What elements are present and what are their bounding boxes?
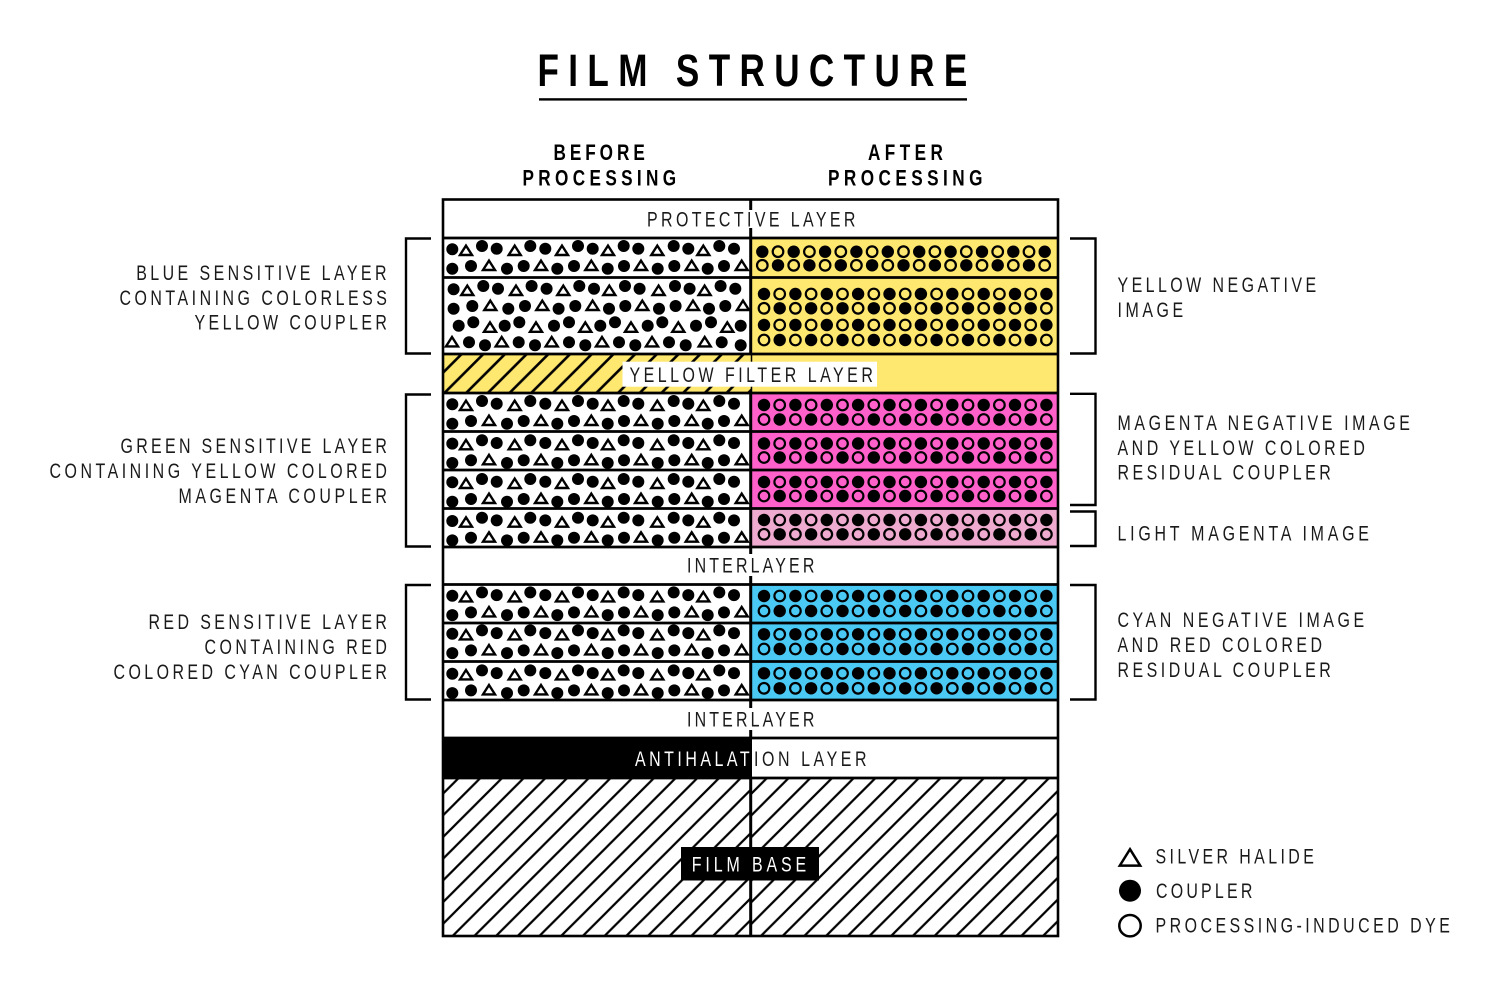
text: cyan negative image — [1118, 608, 1364, 682]
yellow filter hatch — [443, 354, 751, 393]
text: magenta negative image: MAGENTA NEGATIVE IMAGE — [1118, 411, 1410, 435]
text: red sensitive layer: RED SENSITIVE LAYER — [148, 610, 387, 634]
text: blue sensitive layer: BLUE SENSITIVE LAYER — [136, 261, 387, 285]
label: interlayer upper: INTERLAYER — [687, 554, 814, 577]
label: protective layer: PROTECTIVE LAYER — [647, 207, 855, 231]
bracket: red sensitive — [406, 585, 431, 700]
magenta negative dyes — [758, 399, 1053, 502]
column heading: before processing — [522, 141, 676, 191]
column heading: after processing: AFTER — [868, 141, 943, 166]
label: antihalation layer: ION LAYER — [754, 747, 867, 771]
text: green sensitive layer: GREEN SENSITIVE LAYER — [120, 434, 387, 458]
label: antihalation layer: ANTIHALAT — [635, 747, 750, 771]
cyan negative dyes — [758, 590, 1053, 694]
legend text: processing-induced dye: PROCESSING-INDUCED DYE — [1156, 914, 1450, 937]
protective layer — [443, 200, 1058, 238]
bracket: blue sensitive — [406, 238, 431, 354]
light magenta dyes — [758, 514, 1053, 540]
red sensitive layer grains — [446, 586, 748, 699]
bracket: yellow negative — [1070, 238, 1096, 354]
text: blue sensitive layer: CONTAINING COLORLESS — [120, 286, 387, 310]
text: blue sensitive layer — [120, 261, 387, 334]
text: yellow negative image — [1118, 273, 1316, 322]
text: red sensitive layer — [114, 610, 387, 684]
column heading: before processing: PROCESSING — [522, 166, 676, 191]
column heading: after processing: PROCESSING — [828, 166, 982, 191]
text: green sensitive layer — [50, 434, 387, 508]
label: antihalation layer — [635, 747, 867, 771]
label: interlayer lower: INTERLAYER — [687, 708, 814, 731]
column heading: before processing: BEFORE — [554, 141, 645, 166]
icon: silver halide triangle — [1120, 849, 1140, 866]
bracket: cyan negative — [1070, 585, 1096, 700]
title: FILM STRUCTURE — [538, 45, 967, 96]
cyan layer fill — [751, 584, 1058, 700]
text: light magenta image: LIGHT MAGENTA IMAGE — [1118, 522, 1369, 545]
label: film base: FILM BASE — [692, 853, 806, 876]
text: magenta negative image: RESIDUAL COUPLER — [1118, 461, 1331, 484]
film base hatch left — [443, 778, 751, 936]
icon: coupler filled circle — [1119, 880, 1141, 902]
text: cyan negative image: AND RED COLORED — [1118, 633, 1322, 657]
label: film base — [681, 847, 819, 880]
blue sensitive layer grains — [446, 240, 749, 351]
text: yellow negative image: YELLOW NEGATIVE — [1118, 273, 1316, 297]
green sensitive layer grains — [446, 395, 748, 546]
antihalation black band — [443, 738, 752, 778]
yellow negative dyes — [756, 246, 1053, 346]
bracket: green sensitive — [406, 394, 431, 546]
film base hatch right — [751, 778, 1058, 936]
legend text: coupler: COUPLER — [1156, 879, 1252, 903]
text: yellow negative image: IMAGE — [1118, 298, 1183, 322]
yellow layer fills — [443, 238, 1058, 393]
text: magenta negative image — [1118, 411, 1410, 484]
text: red sensitive layer: COLORED CYAN COUPLER — [114, 660, 387, 684]
text: green sensitive layer: MAGENTA COUPLER — [178, 484, 387, 508]
label: yellow filter layer: YELLOW FILTER LAYER — [630, 363, 873, 387]
text: cyan negative image: RESIDUAL COUPLER — [1118, 658, 1331, 682]
magenta layer fill — [751, 393, 1058, 508]
bracket: light magenta — [1070, 512, 1096, 546]
legend — [1119, 844, 1450, 937]
icon: processing-induced dye ring — [1119, 915, 1141, 936]
column heading: after processing — [828, 141, 982, 191]
bracket: magenta negative — [1070, 394, 1096, 505]
light magenta layer fill — [751, 508, 1058, 547]
legend text: silver halide: SILVER HALIDE — [1156, 844, 1314, 868]
text: cyan negative image: CYAN NEGATIVE IMAGE — [1118, 608, 1364, 632]
text: red sensitive layer: CONTAINING RED — [204, 635, 387, 659]
text: blue sensitive layer: YELLOW COUPLER — [194, 310, 387, 334]
text: magenta negative image: AND YELLOW COLORED — [1118, 436, 1365, 460]
film structure diagram — [443, 199, 1058, 936]
text: green sensitive layer: CONTAINING YELLOW COLORED — [50, 459, 387, 483]
